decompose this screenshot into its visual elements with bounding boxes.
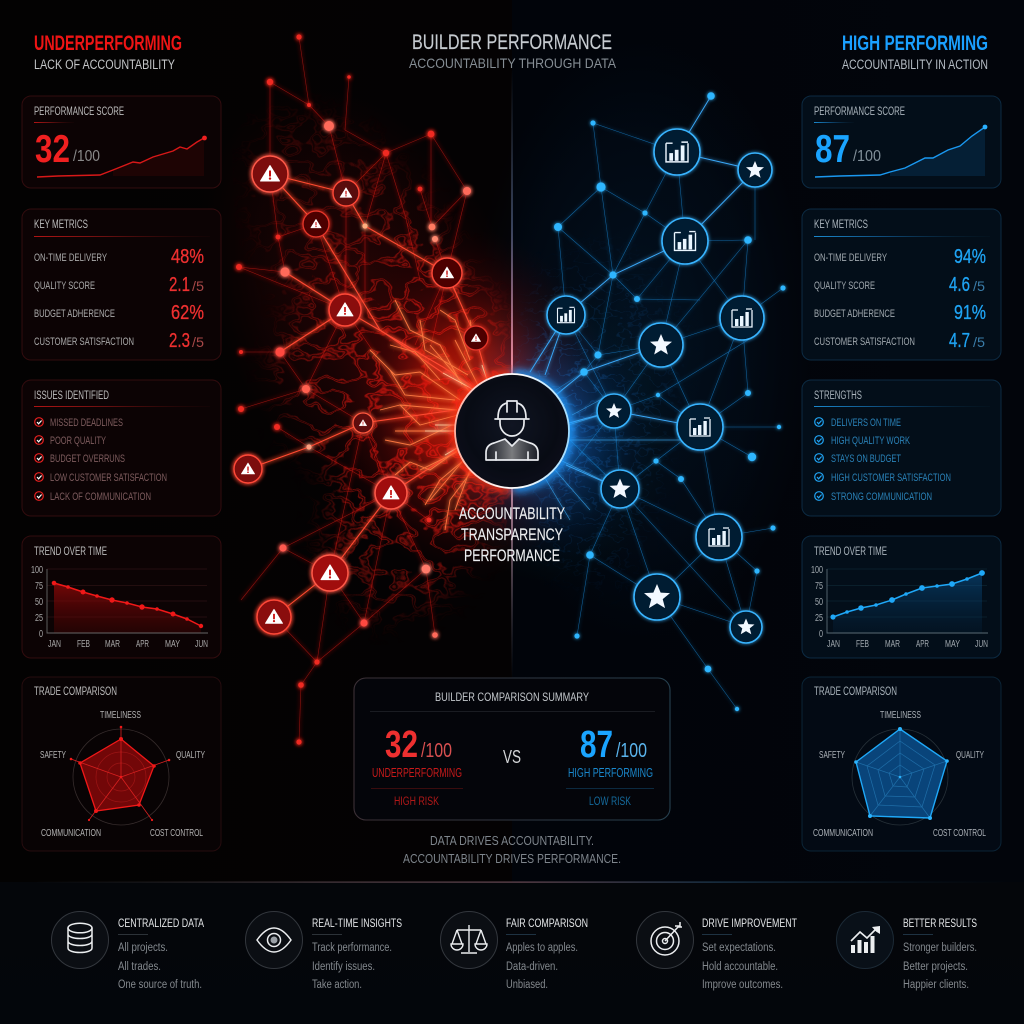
footer item: drive improvement: DRIVE IMPROVEMENT — [702, 916, 797, 930]
panel: left key metrics: CUSTOMER SATISFACTION — [34, 336, 134, 348]
footer item: centralized data: All trades. — [118, 961, 161, 973]
line chart: JAN — [827, 639, 840, 650]
underperforming score: UNDERPERFORMING — [372, 766, 462, 780]
centre keywords: PERFORMANCE — [464, 546, 560, 565]
panel: right trend over time: TREND OVER TIME — [814, 546, 887, 558]
panel: builder comparison summary — [354, 678, 670, 820]
tagline — [403, 833, 621, 866]
thin red connections — [239, 37, 467, 742]
icon: eye — [246, 912, 302, 968]
icon: balance scales — [440, 912, 498, 968]
red warning nodes — [234, 156, 488, 634]
panel: issues identified: POOR QUALITY — [50, 435, 106, 447]
panel: right performance score — [802, 96, 1001, 188]
panel: issues identified: BUDGET OVERRUNS — [50, 453, 125, 465]
centre keywords: ACCOUNTABILITY — [459, 504, 565, 523]
tagline: DATA DRIVES ACCOUNTABILITY. — [430, 833, 594, 848]
panel: left trade comparison: COMMUNICATION — [41, 827, 101, 839]
line chart: FEB — [77, 639, 90, 650]
line chart: JUN — [195, 639, 208, 650]
high performing score: LOW RISK — [589, 796, 631, 808]
line chart: JUN — [975, 639, 988, 650]
panel: right trade comparison: TRADE COMPARISON — [814, 686, 897, 698]
radar chart — [70, 726, 170, 825]
panel: left trade comparison: QUALITY — [176, 749, 205, 761]
panel: right trade comparison: QUALITY — [956, 749, 984, 761]
panel: left key metrics: 62% — [171, 302, 204, 324]
line chart: 25 — [815, 613, 823, 624]
footer item: drive improvement: Set expectations. — [702, 942, 776, 954]
line chart — [31, 565, 208, 650]
panel: issues identified: LACK OF COMMUNICATION — [50, 491, 151, 503]
tagline: ACCOUNTABILITY DRIVES PERFORMANCE. — [403, 851, 621, 866]
footer item: fair comparison: Data-driven. — [506, 961, 558, 973]
footer item: drive improvement — [636, 912, 797, 991]
thin blue connections — [530, 123, 783, 709]
sparkline — [890, 127, 985, 176]
panel: left key metrics: /5 — [192, 334, 204, 350]
panel: issues identified: MISSED DEADLINES — [50, 417, 123, 429]
centre keywords: TRANSPARENCY — [461, 525, 563, 544]
line chart: APR — [136, 639, 149, 650]
panel: right key metrics: 4.7 — [949, 330, 970, 352]
panel: right key metrics: CUSTOMER SATISFACTION — [814, 336, 915, 348]
line chart: JAN — [48, 639, 61, 650]
high performing score — [566, 724, 654, 808]
issue check icons — [35, 418, 43, 500]
panel: left key metrics: QUALITY SCORE — [34, 280, 95, 292]
footer item: centralized data: All projects. — [118, 942, 168, 954]
panel: right key metrics — [802, 209, 1001, 360]
footer item: real-time insights — [246, 912, 402, 991]
footer band — [0, 882, 1024, 1024]
panel: left performance score: PERFORMANCE SCORE — [34, 106, 124, 118]
line chart: 50 — [815, 597, 823, 608]
panel: right trade comparison — [802, 677, 1001, 851]
line chart: MAY — [945, 639, 960, 650]
icon: target — [636, 912, 694, 968]
panel: right key metrics: 91% — [954, 302, 986, 324]
title: BUILDER PERFORMANCE — [412, 31, 612, 54]
score value: 32 — [35, 128, 70, 171]
title — [409, 31, 617, 71]
high performing score: HIGH PERFORMING — [568, 766, 653, 780]
panel: issues identified — [22, 380, 221, 516]
panel: left trade comparison: TRADE COMPARISON — [34, 686, 117, 698]
panel: strengths: HIGH CUSTOMER SATISFACTION — [831, 472, 951, 484]
left column heading — [34, 32, 182, 72]
panel: right performance score: PERFORMANCE SCORE — [814, 106, 905, 118]
panel: right key metrics: KEY METRICS — [814, 219, 868, 231]
footer item: drive improvement: Hold accountable. — [702, 961, 778, 973]
panel: left trade comparison: TIMELINESS — [100, 709, 141, 721]
panel: issues identified: LOW CUSTOMER SATISFACTION — [50, 472, 167, 484]
line chart: 100 — [811, 565, 823, 576]
panel: right trade comparison: COST CONTROL — [933, 827, 986, 839]
panel: strengths: STRONG COMMUNICATION — [831, 491, 932, 503]
panel: left performance score — [22, 96, 221, 188]
bright red connections — [248, 174, 500, 617]
panel: right key metrics: ON-TIME DELIVERY — [814, 252, 887, 264]
blue small nodes — [554, 92, 786, 711]
panel: left trend over time: TREND OVER TIME — [34, 546, 107, 558]
panel: right trend over time — [802, 536, 1001, 658]
footer item: better results: Happier clients. — [903, 979, 969, 991]
panel: right key metrics: 94% — [954, 246, 986, 268]
underperforming score: 32 — [385, 724, 418, 766]
line chart: 0 — [819, 629, 823, 640]
panel: right performance score: /100 — [853, 148, 881, 165]
footer item: centralized data: One source of truth. — [118, 979, 202, 991]
footer item: better results: Stronger builders. — [903, 942, 977, 954]
panel: left trade comparison — [22, 677, 221, 851]
panel: right key metrics: BUDGET ADHERENCE — [814, 308, 895, 320]
icon: builder with hard hat — [486, 401, 538, 460]
footer item: fair comparison: FAIR COMPARISON — [506, 916, 588, 930]
panel: strengths: HIGH QUALITY WORK — [831, 435, 910, 447]
panel: left trade comparison: SAFETY — [40, 749, 66, 761]
panel: left key metrics: 2.1 — [169, 274, 190, 296]
footer item: fair comparison: Unbiased. — [506, 979, 548, 991]
network: high performing blue side — [530, 92, 786, 711]
panel: right key metrics: /5 — [973, 278, 985, 294]
panel: right key metrics: QUALITY SCORE — [814, 280, 875, 292]
footer item: better results: BETTER RESULTS — [903, 916, 977, 930]
central hub: builder — [454, 373, 570, 489]
panel: right trade comparison: SAFETY — [819, 749, 845, 761]
line chart: 100 — [31, 565, 43, 576]
right column heading — [842, 32, 988, 72]
panel: left trend over time — [22, 536, 221, 658]
underperforming score: /100 — [421, 740, 452, 762]
vein texture: red side — [246, 106, 512, 630]
panel: left key metrics — [22, 209, 221, 360]
icon: growth chart — [836, 912, 894, 968]
high performing score: /100 — [616, 740, 647, 762]
footer item: centralized data: CENTRALIZED DATA — [118, 916, 204, 930]
line chart: APR — [916, 639, 929, 650]
blue hub rays — [540, 395, 700, 520]
sparkline — [113, 138, 204, 176]
vein texture: blue side — [512, 253, 678, 584]
footer item: real-time insights: Track performance. — [312, 942, 392, 954]
footer item: real-time insights: Take action. — [312, 979, 362, 991]
line chart: MAR — [105, 639, 120, 650]
footer item: centralized data — [52, 912, 204, 991]
panel: left key metrics: ON-TIME DELIVERY — [34, 252, 107, 264]
left column heading: UNDERPERFORMING — [34, 32, 182, 55]
footer item: drive improvement: Improve outcomes. — [702, 979, 783, 991]
panel: strengths: STAYS ON BUDGET — [831, 453, 901, 465]
panel: left key metrics: BUDGET ADHERENCE — [34, 308, 115, 320]
panel: left key metrics: 48% — [171, 246, 204, 268]
line chart: 50 — [35, 597, 43, 608]
blue icon nodes — [547, 129, 772, 643]
panel: left trade comparison: COST CONTROL — [150, 827, 203, 839]
panel: left key metrics: 2.3 — [169, 330, 190, 352]
high performing score: 87 — [580, 724, 613, 766]
panel: left key metrics: KEY METRICS — [34, 219, 88, 231]
panel: left performance score: /100 — [73, 148, 100, 165]
footer item: fair comparison — [440, 912, 588, 991]
line chart: FEB — [856, 639, 869, 650]
line chart — [811, 565, 988, 650]
underperforming score: HIGH RISK — [394, 796, 439, 808]
panel: right trade comparison: TIMELINESS — [880, 709, 921, 721]
panel: right key metrics: /5 — [973, 334, 985, 350]
panel: builder comparison summary: BUILDER COMPARISON SUMMARY — [435, 692, 589, 704]
score value: 87 — [815, 128, 850, 171]
radar chart — [852, 727, 949, 825]
line chart: MAY — [165, 639, 180, 650]
orange hot veins near hub — [370, 300, 480, 530]
footer item: fair comparison: Apples to apples. — [506, 942, 578, 954]
panel: strengths: DELIVERS ON TIME — [831, 417, 901, 429]
bright blue connections — [530, 96, 755, 489]
centre keywords — [459, 504, 565, 565]
line chart: 0 — [39, 629, 43, 640]
panel: issues identified: ISSUES IDENTIFIED — [34, 390, 109, 402]
underperforming score — [371, 724, 463, 808]
versus: VS — [503, 747, 521, 767]
footer item: real-time insights: Identify issues. — [312, 961, 375, 973]
footer item: real-time insights: REAL-TIME INSIGHTS — [312, 916, 402, 930]
line chart: 75 — [35, 581, 43, 592]
title: ACCOUNTABILITY THROUGH DATA — [409, 55, 617, 71]
panel: strengths: STRENGTHS — [814, 390, 862, 402]
footer item: better results: Better projects. — [903, 961, 968, 973]
panel: left key metrics: /5 — [192, 278, 204, 294]
line chart: 25 — [35, 613, 43, 624]
right column heading: ACCOUNTABILITY IN ACTION — [842, 57, 988, 72]
network: underperforming red side — [234, 34, 500, 745]
strength check icons — [815, 418, 823, 500]
panel: right trade comparison: COMMUNICATION — [813, 827, 873, 839]
panel: right key metrics: 4.6 — [949, 274, 970, 296]
panel: strengths — [802, 380, 1001, 516]
central network glow — [133, 29, 810, 679]
icon: database — [52, 912, 108, 968]
line chart: 75 — [815, 581, 823, 592]
red small nodes — [236, 34, 471, 745]
left column heading: LACK OF ACCOUNTABILITY — [34, 57, 175, 72]
footer item: better results — [836, 912, 977, 991]
line chart: MAR — [885, 639, 900, 650]
